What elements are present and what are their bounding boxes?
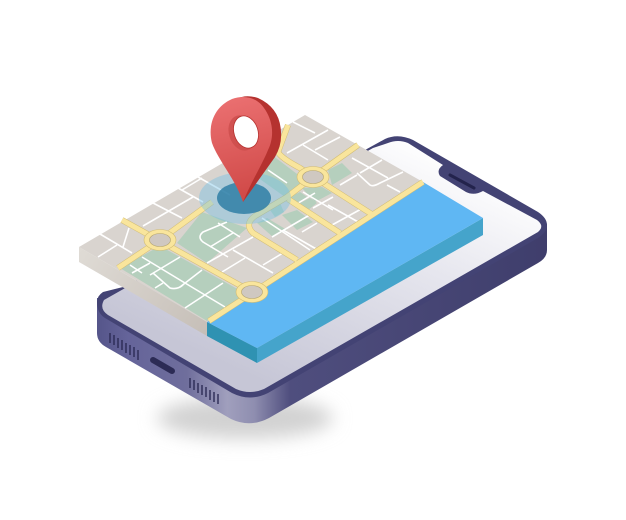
pin hole bevel (224, 112, 260, 154)
roundabout left (144, 230, 176, 250)
outer ripple (199, 172, 291, 224)
white street grid (98, 122, 403, 308)
green parks (120, 152, 352, 321)
yellow roads fill (118, 125, 423, 321)
water right side (257, 218, 483, 363)
location pin (211, 96, 281, 202)
phone body (97, 136, 547, 423)
earpiece slot (450, 175, 474, 188)
phone side wall (97, 224, 547, 423)
phone screen (102, 141, 541, 392)
phone rim (97, 136, 547, 398)
inner ripple (217, 182, 271, 214)
phone ground shadow (157, 397, 333, 439)
roundabout top (297, 166, 329, 188)
pin back (236, 96, 281, 202)
water surface (207, 182, 483, 348)
map block (79, 115, 423, 336)
speaker grille right (190, 378, 218, 404)
speaker grille left (110, 333, 138, 360)
location ripple (199, 172, 291, 224)
map surface (79, 115, 423, 322)
map side (79, 247, 207, 336)
charging port (153, 360, 172, 371)
yellow roads outline (118, 125, 423, 321)
water left side (207, 322, 257, 363)
roundabout bottom (236, 282, 268, 302)
pin front (211, 97, 272, 202)
pin hole (229, 113, 263, 151)
water block (207, 182, 483, 363)
